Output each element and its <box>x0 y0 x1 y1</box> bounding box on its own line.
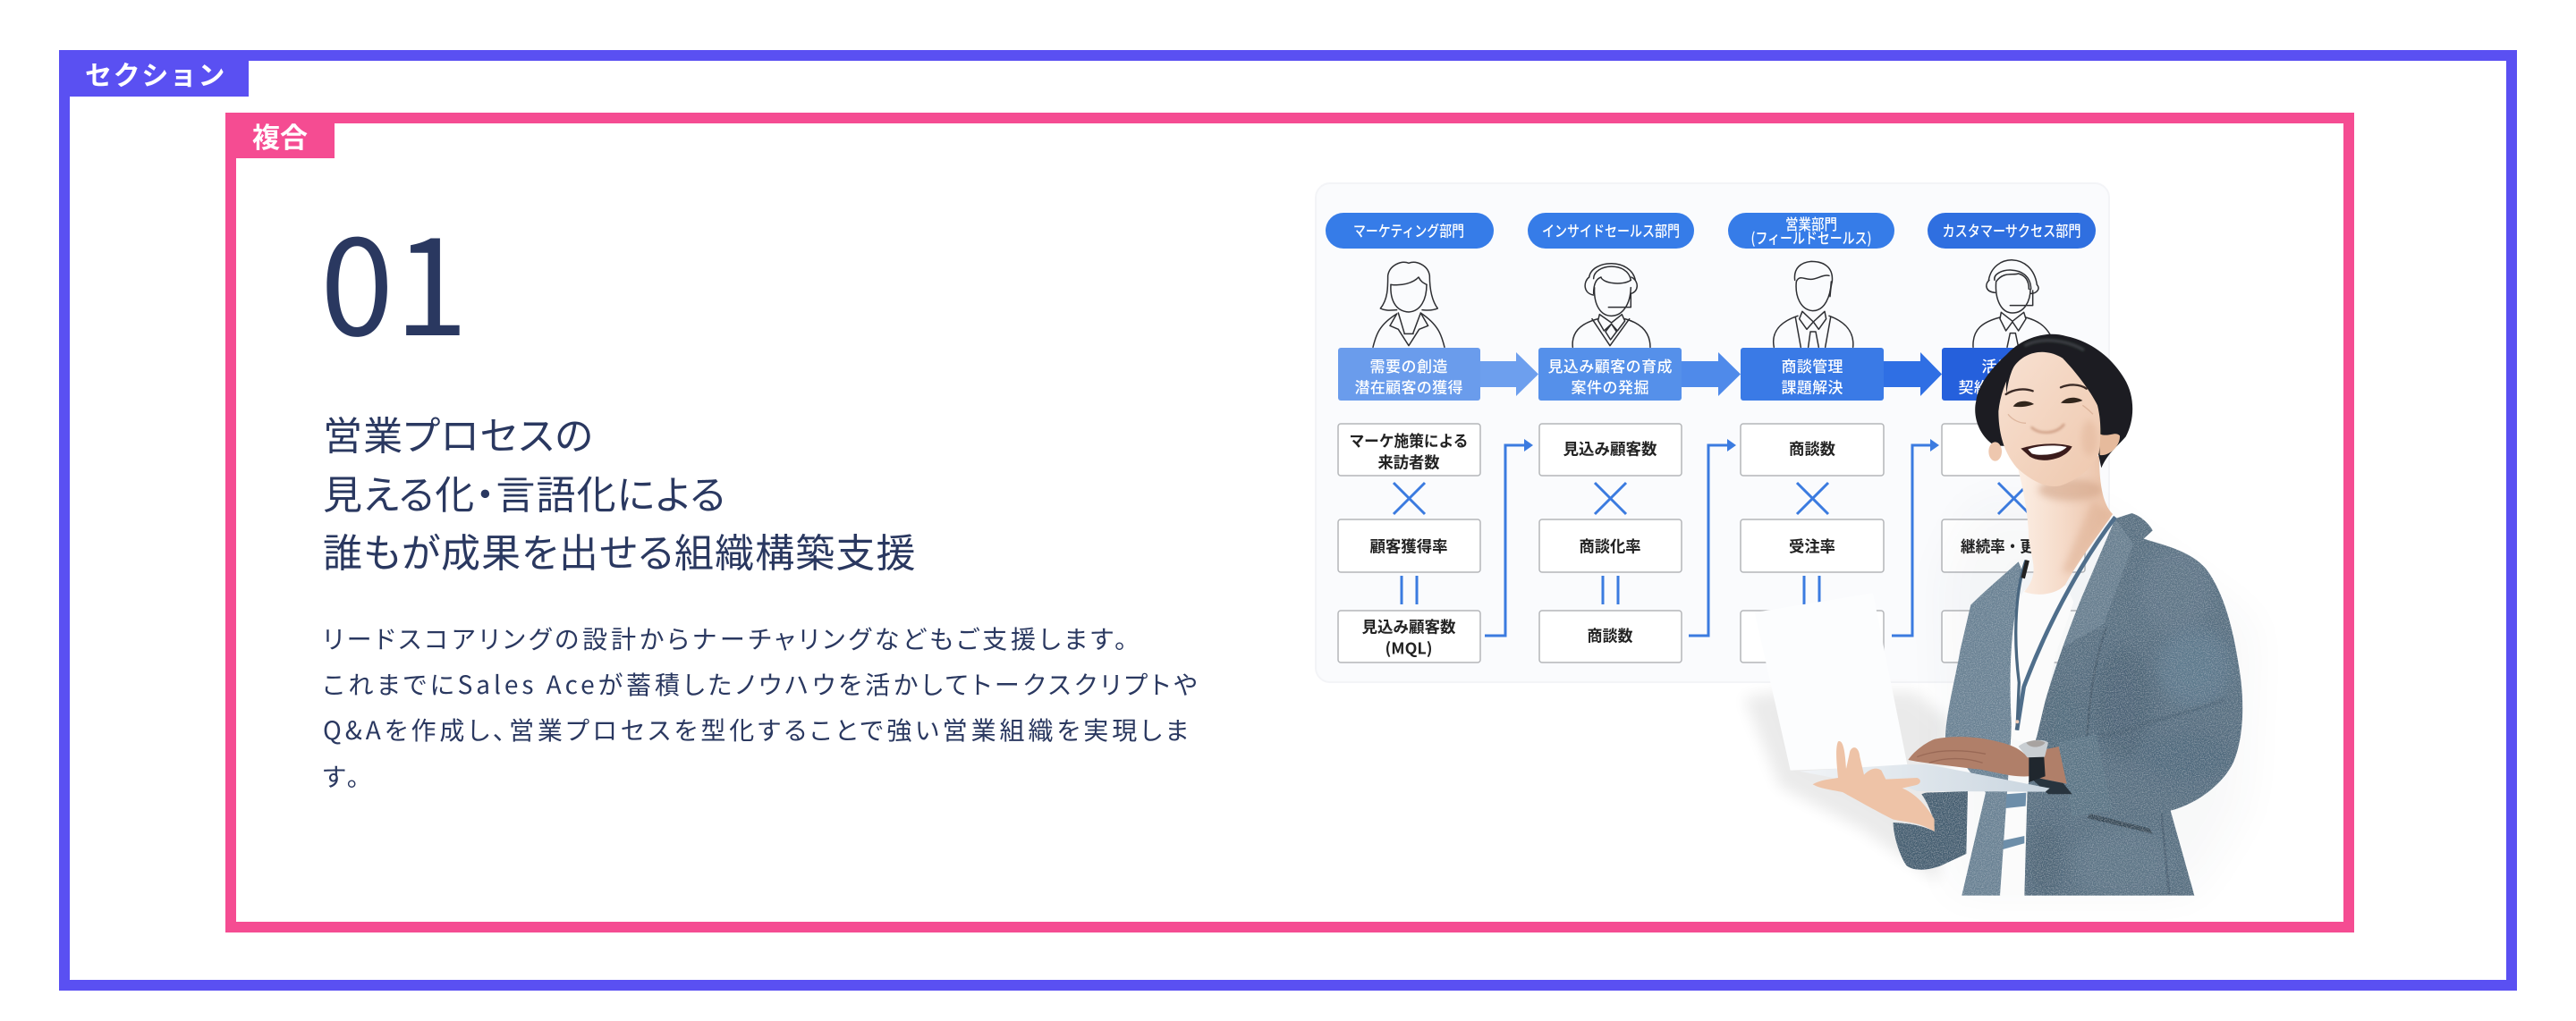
heading <box>323 404 917 578</box>
KPI column 1: 来訪者数 <box>1377 451 1440 474</box>
lanyard <box>2015 517 2115 730</box>
t-shirt <box>2000 586 2073 896</box>
body text: これまでにSales Aceが蓄積したノウハウを活かしてトークスクリプトや <box>323 666 1200 702</box>
composite label <box>225 113 335 158</box>
eyebrows <box>2006 384 2087 394</box>
cheek shading <box>2081 420 2097 456</box>
panel: diagram card <box>1316 183 2109 682</box>
forehead strand <box>2006 358 2019 393</box>
face <box>1998 352 2100 486</box>
process steps and arrows: 契約の継続更新 <box>1959 375 2066 397</box>
left sleeve, laptop and left hand <box>1755 593 2050 870</box>
nose <box>2032 425 2063 433</box>
KPI column 1: マーケ施策による <box>1349 429 1469 452</box>
process steps and arrows: 活用支援 <box>1982 354 2043 376</box>
eyes <box>2013 401 2034 407</box>
head <box>1975 334 2132 486</box>
connector arrows <box>1485 439 1939 636</box>
KPI column 1: 顧客獲得率 <box>1370 535 1447 558</box>
KPI column 1: 見込み顧客数 <box>1361 615 1456 638</box>
neck <box>2017 456 2113 595</box>
KPI column 4 <box>1942 424 2085 662</box>
department pills <box>1326 212 2096 249</box>
icon: headset operator <box>1572 264 1650 347</box>
laptop lid <box>1755 593 1908 771</box>
ears <box>1988 442 2002 461</box>
process steps and arrows: 需要の創造 <box>1370 354 1447 376</box>
process steps and arrows: 商談管理 <box>1782 354 1843 376</box>
laptop base <box>1800 764 2050 792</box>
KPI column 3 <box>1741 424 1884 662</box>
department pills: マーケティング部門 <box>1353 218 1464 241</box>
process steps and arrows: 見込み顧客の育成 <box>1547 354 1673 376</box>
KPI column 1 <box>1338 424 1480 662</box>
department pills: インサイドセールス部門 <box>1542 218 1680 241</box>
jacket body <box>1945 513 2242 900</box>
KPI column 2: 商談化率 <box>1580 535 1640 558</box>
process steps and arrows: 案件の発掘 <box>1571 375 1649 397</box>
right sleeve cuff <box>1908 735 2113 816</box>
KPI column 2: 商談数 <box>1587 624 1633 647</box>
section label <box>59 50 249 97</box>
department pills: カスタマーサクセス部門 <box>1943 218 2080 241</box>
process steps and arrows: 潜在顧客の獲得 <box>1354 375 1463 397</box>
department pills: (フィールドセールス) <box>1751 225 1871 249</box>
department pills: 営業部門 <box>1785 212 1837 234</box>
illustration: sales process diagram and person <box>1315 182 2243 896</box>
KPI column 3: 受注率 <box>1789 535 1835 558</box>
KPI column 3: 商談数 <box>1789 438 1835 460</box>
KPI column 2: 見込み顧客数 <box>1563 438 1657 460</box>
heading: 営業プロセスの <box>323 404 594 461</box>
process steps and arrows <box>1338 348 2085 401</box>
photo: person <box>1755 334 2242 900</box>
hair <box>1975 334 2132 468</box>
body text: す。 <box>323 758 362 794</box>
KPI column 2 <box>1539 424 1682 662</box>
right hand <box>1908 737 2067 784</box>
KPI column 4: 継続率・更新率 <box>1961 535 2064 558</box>
icon: field salesman <box>1774 261 1853 347</box>
number: 01 <box>320 181 469 374</box>
KPI column 1: (MQL) <box>1385 637 1433 660</box>
process steps and arrows: 課題解決 <box>1782 375 1843 397</box>
heading: 見える化・言語化による <box>323 463 726 520</box>
left hand <box>1813 741 1935 831</box>
mouth <box>2021 443 2072 460</box>
icon: customer success operator <box>1973 260 2051 347</box>
body text: リードスコアリングの設計からナーチャリングなどもご支援します。 <box>323 620 1131 656</box>
composite label: 複合 <box>252 115 308 156</box>
watch <box>2029 753 2046 782</box>
icon: woman marketer <box>1373 262 1445 347</box>
section label: セクション <box>85 54 226 93</box>
photo: soft shadow behind person <box>1744 501 2254 894</box>
body text <box>323 620 1200 794</box>
composite frame <box>225 113 2354 932</box>
heading: 誰もが成果を出せる組織構築支援 <box>323 521 917 578</box>
body text: Q&Aを作成し、営業プロセスを型化することで強い営業組織を実現しま <box>323 712 1192 747</box>
